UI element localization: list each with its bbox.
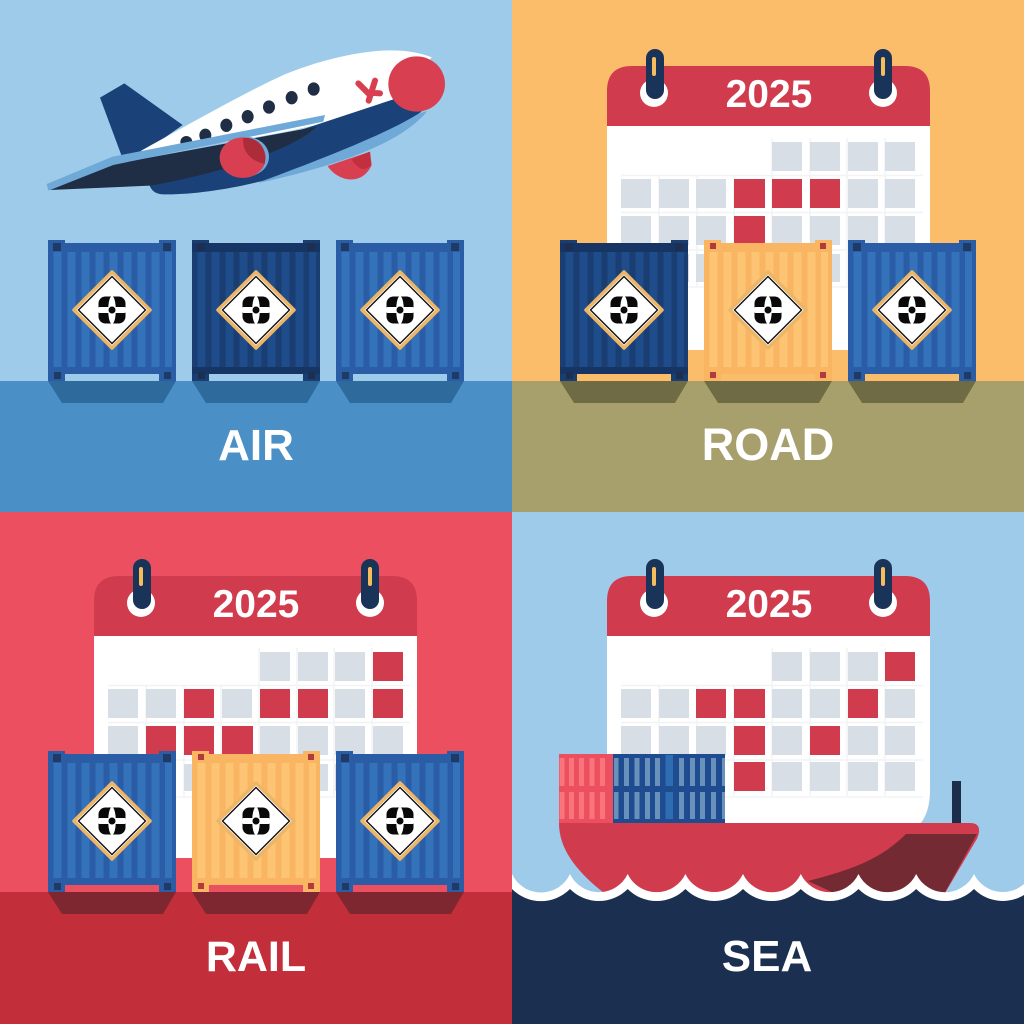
waves — [512, 874, 1024, 1000]
label: air: AIR — [218, 421, 294, 470]
sea — [512, 889, 1024, 1024]
ship: funnel — [952, 781, 961, 824]
panel: sea — [512, 512, 1024, 1024]
container: blue right — [848, 240, 976, 381]
container: blue right — [336, 240, 464, 381]
calendar: road: 2025 — [726, 73, 812, 116]
calendar: sea: 2025 — [726, 583, 812, 626]
panel: rail — [0, 512, 512, 1024]
panel: air — [0, 0, 512, 512]
container: blue left — [48, 751, 176, 892]
container: blue right — [336, 751, 464, 892]
ship: cargo containers — [559, 754, 725, 823]
calendar: road — [607, 49, 930, 350]
calendar: rail: 2025 — [213, 583, 299, 626]
container shadows — [560, 381, 976, 403]
calendar: sea — [607, 559, 930, 824]
label: rail: RAIL — [206, 933, 306, 981]
container: navy left — [560, 240, 688, 381]
label: sea: SEA — [722, 932, 812, 981]
container shadows — [48, 381, 464, 403]
panel: road — [512, 0, 1024, 512]
container: yellow centre — [704, 240, 832, 381]
icon: airplane — [47, 50, 445, 194]
container shadows — [48, 892, 464, 914]
label: road: ROAD — [702, 419, 834, 470]
container: navy centre — [192, 240, 320, 381]
container: blue left — [48, 240, 176, 381]
calendar: rail — [94, 559, 417, 858]
container: yellow centre — [192, 751, 320, 892]
ship: hull — [559, 823, 979, 905]
